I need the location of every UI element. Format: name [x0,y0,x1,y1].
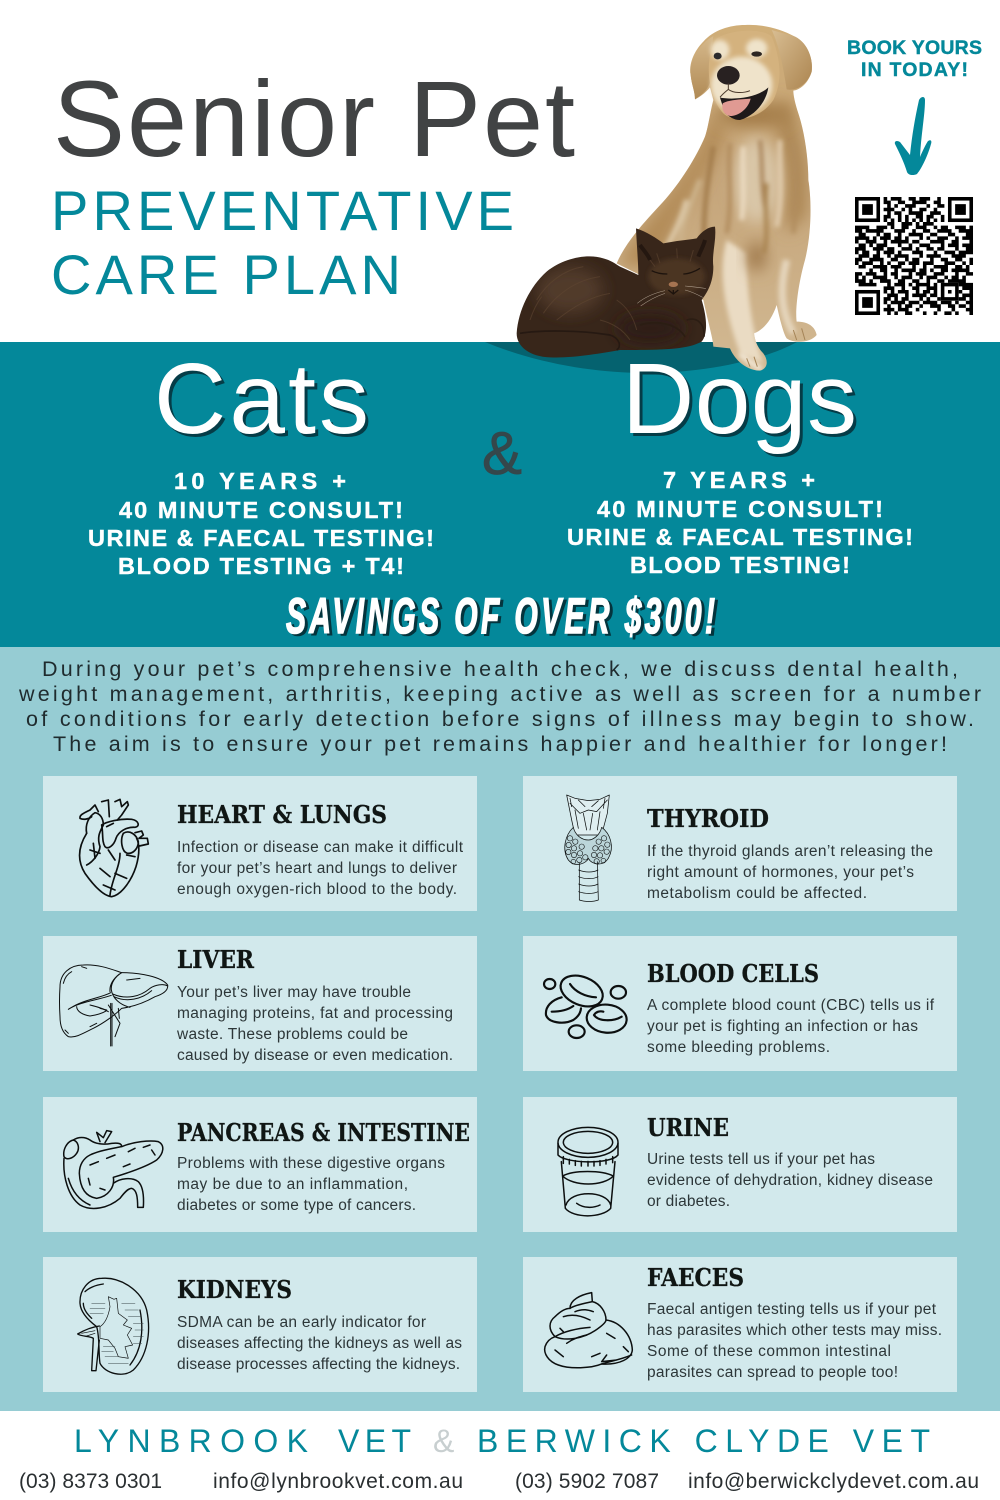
heading: kidneys: KIDNEYS [177,1275,292,1304]
footer clinic names: & [433,1423,454,1459]
ground shadow under pets [485,342,797,373]
text: urine: Urine tests tell us if your pet has [647,1151,875,1168]
text: thyroid: right amount of hormones, your pet’s [647,864,914,881]
cats plan list [88,468,434,579]
panel: urine [523,1097,957,1232]
text: faeces: Some of these common intestinal [647,1343,891,1360]
subtitle: CARE PLAN [51,243,401,306]
text: blood cells: some bleeding problems. [647,1039,830,1056]
text: heart and lungs [177,839,464,898]
text: urine: or diabetes. [647,1193,730,1210]
text: kidneys [177,1314,462,1373]
intro paragraph: of conditions for early detection before signs of illness may begin to show. [26,707,974,731]
text: urine: evidence of dehydration, kidney disease [647,1172,933,1189]
icon: thyroid [565,795,611,901]
panel: faeces [523,1257,957,1392]
cats plan list: 10 YEARS + [174,468,346,494]
dogs plan list: URINE & FAECAL TESTING! [567,524,913,550]
text: pancreas and intestine: Problems with these digestive organs [177,1155,445,1172]
text: kidneys: disease processes affecting the kidneys. [177,1356,460,1373]
intro paragraph: weight management, arthritis, keeping active as well as screen for a number [18,682,981,706]
text: faeces: Faecal antigen testing tells us if your pet [647,1301,937,1318]
heading: urine: URINE [647,1113,729,1142]
heading: blood cells: BLOOD CELLS [647,959,819,988]
text: liver: managing proteins, fat and processing [177,1005,453,1022]
text: liver [176,984,453,1064]
text: liver: waste. These problems could be [176,1026,408,1043]
heading: thyroid: THYROID [647,804,769,833]
dog face [709,31,779,120]
heading: Cats: Cats [154,343,369,455]
text: thyroid: metabolism could be affected. [647,885,867,902]
ampersand: & [482,420,522,487]
text: blood cells: your pet is fighting an infection or has [647,1018,918,1035]
dog ears [690,30,812,99]
title: Senior Pet [53,58,575,179]
savings banner: SAVINGS OF OVER $300! [286,588,715,644]
cats plan list: URINE & FAECAL TESTING! [88,525,434,551]
footer clinic names: LYNBROOK [74,1423,308,1459]
heading: heart and lungs: HEART & LUNGS [177,800,387,829]
intro paragraph: The aim is to ensure your pet remains happier and healthier for longer! [53,732,947,756]
text: liver: Your pet’s liver may have trouble [177,984,411,1001]
text: heart and lungs: enough oxygen-rich blood to the body. [177,881,457,898]
icon: pancreas [64,1131,163,1208]
heading: pancreas and intestine: PANCREAS & INTESTINE [177,1118,470,1147]
icon: blood cells [544,970,628,1038]
dog paw details [747,328,805,367]
heading: faeces: FAECES [647,1263,744,1292]
intro paragraph: During your pet’s comprehensive health check, we discuss dental health, [42,657,958,681]
teal banner [0,342,1000,647]
panel: kidneys [43,1257,477,1392]
text: faeces: parasites can spread to people too! [647,1364,898,1381]
heading: Dogs: Dogs [625,346,860,458]
text: pancreas and intestine: may be due to an inflammation, [177,1176,408,1193]
illustration: black cat [517,227,715,357]
subtitle [51,179,514,306]
footer contact details: (03) 5902 7087 [515,1470,659,1493]
text: heart and lungs: Infection or disease can make it difficult [177,839,464,856]
panel: blood cells [523,936,957,1071]
footer clinic names: VET [338,1423,411,1459]
icon: heart [80,799,148,897]
QR code [855,199,973,313]
text: kidneys: diseases affecting the kidneys as well as [177,1335,462,1352]
text: pancreas and intestine [177,1155,445,1214]
icon: urine specimen cup [558,1127,618,1216]
subtitle: PREVENTATIVE [51,179,514,242]
cats plan list: 40 MINUTE CONSULT! [119,497,403,523]
text: thyroid: If the thyroid glands aren’t releasing the [647,843,933,860]
footer clinic names [74,1423,930,1459]
text: blood cells: A complete blood count (CBC) tells us if [647,997,935,1014]
footer contact details: info@lynbrookvet.com.au [213,1470,463,1493]
icon: kidney [78,1278,149,1374]
cats plan list: BLOOD TESTING + T4! [118,553,404,579]
text: faeces [647,1301,942,1381]
illustration: golden retriever dog [617,25,817,371]
dogs plan list [567,467,913,578]
text: pancreas and intestine: diabetes or some type of cancers. [177,1197,416,1214]
heading: Cats: Cats [157,346,372,458]
text: thyroid [647,843,933,902]
heading: liver: LIVER [177,945,255,974]
dogs plan list: BLOOD TESTING! [630,552,850,578]
icon: liver [59,965,168,1046]
arrow pointing to QR code [895,97,931,175]
panel: liver [43,936,477,1071]
book call to action: BOOK YOURS [847,37,982,59]
cat face [652,268,700,294]
footer clinic names: BERWICK CLYDE VET [477,1423,930,1459]
footer contact details: info@berwickclydevet.com.au [688,1470,979,1493]
panel: heart and lungs [43,776,477,911]
dogs plan list: 7 YEARS + [663,467,815,493]
text: blood cells [647,997,935,1056]
heading: Dogs: Dogs [622,343,857,455]
text: faeces: has parasites which other tests may miss. [647,1322,942,1339]
book call to action: IN TODAY! [861,59,968,81]
intro paragraph [18,657,981,756]
footer contact details: (03) 8373 0301 [19,1470,162,1493]
panel: pancreas and intestine [43,1097,477,1232]
light teal section background [0,647,1000,1411]
dogs plan list: 40 MINUTE CONSULT! [597,496,883,522]
text: heart and lungs: for your pet’s heart and lungs to deliver [177,860,457,877]
text: kidneys: SDMA can be an early indicator for [177,1314,426,1331]
panel: thyroid [523,776,957,911]
footer contact details [19,1470,979,1493]
text: liver: caused by disease or even medication. [177,1047,453,1064]
savings banner: SAVINGS OF OVER $300! [289,590,718,646]
icon: faeces [545,1293,632,1368]
text: urine [647,1151,933,1210]
book call to action [847,37,982,81]
